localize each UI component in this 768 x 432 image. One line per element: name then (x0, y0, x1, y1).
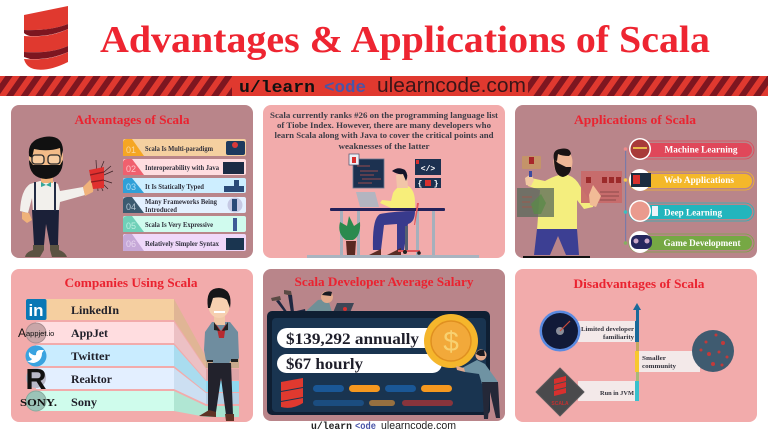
pill: annual salary: $139,292 annually (286, 331, 419, 348)
icon: Scala logo (24, 6, 68, 70)
panel: companies using Scala (11, 269, 253, 422)
illustration: developer at desk (307, 154, 479, 258)
text block: of Tiobe Index. However, there are many developers who (277, 120, 491, 130)
text block: Scala currently ranks #26 on the programming language list (270, 110, 498, 120)
heading: Scala Developer Average Salary (294, 274, 474, 289)
row: AppJet (18, 322, 174, 343)
row 06: 06 (126, 239, 136, 249)
illustration: man pushing coin (456, 350, 500, 419)
red panel (581, 171, 622, 203)
pill: game development: Game Development (664, 238, 740, 248)
pill: hourly salary (277, 354, 442, 373)
row: AppJet: A (18, 326, 26, 340)
panel: applications of Scala (515, 105, 757, 258)
item: limited developer familiarity (540, 310, 635, 352)
row 05: 05 (126, 221, 136, 231)
illustration: developer at desk: } (434, 180, 439, 189)
code panel (517, 188, 554, 217)
row 04: Many Frameworks Being (145, 199, 218, 206)
row: Reaktor: Reaktor (71, 374, 112, 386)
row 06: Relatively Simpler Syntax (145, 241, 220, 248)
pill: machine learning: Machine Learning (664, 144, 738, 154)
screen (267, 311, 490, 415)
icon: coin (424, 314, 478, 368)
pill: deep learning: Deep Learning (664, 208, 723, 218)
illustration: lying developer (271, 290, 354, 315)
row 02: Interoperability with Java (145, 165, 220, 172)
row: Twitter: Twitter (71, 351, 110, 363)
footer brand: ulearncode.com (381, 420, 456, 432)
row: Reaktor (26, 364, 174, 396)
pill: web applications: Web Applications (664, 175, 735, 185)
vertical connector (625, 149, 626, 243)
row 05: Scala Is Very Expressive (145, 222, 213, 229)
panel: advantages of Scala (11, 105, 253, 258)
arrow (633, 303, 641, 401)
row 04 (123, 197, 246, 214)
row 04: 04 (126, 202, 136, 212)
text: brand: u/learn (239, 79, 315, 98)
heading: Applications of Scala (574, 112, 697, 127)
illustration: developer at desk: { (418, 180, 423, 189)
illustration: bearded man (20, 137, 113, 257)
pill: hourly salary: $67 hourly (286, 356, 363, 373)
text: website: ulearncode.com (377, 75, 526, 97)
row 03: It Is Statically Typed (145, 184, 204, 191)
text: code: <ode (324, 79, 366, 98)
row 01: Scala Is Multi-paradigm (145, 146, 213, 153)
item: smaller community: community (642, 363, 677, 370)
panel: developer salary (263, 269, 505, 421)
row: AppJet: appjet.io (26, 329, 54, 338)
row 03 (123, 178, 246, 193)
row 01 (123, 139, 246, 156)
text block: learn Scala along with Java to cover the critical points and (274, 130, 494, 140)
row: Sony: Sony (71, 397, 97, 409)
text block: weaknesses of the latter (338, 141, 430, 151)
shaded perspective bands (174, 299, 239, 417)
item: limited developer familiarity: familiarity (603, 334, 635, 341)
banner: striped brand strip (0, 75, 768, 98)
panel: disadvantages of Scala (515, 269, 757, 422)
application pills (624, 138, 754, 253)
row: LinkedIn (26, 299, 174, 320)
panel: Tiobe ranking (263, 105, 505, 258)
list: advantages (123, 139, 246, 251)
item: smaller community: Smaller (642, 355, 666, 362)
item: smaller community (639, 330, 734, 372)
heading: Advantages of Scala (74, 112, 190, 127)
row: Twitter (26, 345, 174, 366)
pill: annual salary (277, 328, 442, 348)
decorative bars (313, 385, 453, 406)
icon: Scala logo small (281, 378, 303, 408)
illustration: man in sweater (199, 288, 239, 421)
row: Sony: SONY. (20, 397, 57, 409)
title: Advantages & Applications of Scala (100, 19, 710, 61)
row: Sony (20, 391, 174, 411)
row 02: 02 (126, 164, 136, 174)
text block (270, 110, 498, 151)
heading: Disadvantages of Scala (574, 276, 705, 291)
row 02 (123, 159, 246, 175)
item: run in JVM: SCALA (551, 401, 569, 407)
item: run in JVM: Run in JVM (600, 390, 635, 397)
icon: coin: $ (443, 326, 459, 357)
row: Reaktor: R (26, 364, 47, 396)
row: LinkedIn: LinkedIn (71, 305, 120, 317)
item: limited developer familiarity: Limited developer (581, 326, 634, 333)
row: AppJet: AppJet (71, 328, 108, 340)
row 06 (123, 234, 246, 251)
row 03: 03 (126, 182, 136, 192)
footer brand (311, 420, 456, 432)
heading: Companies Using Scala (64, 275, 198, 290)
illustration: man with panels (517, 149, 622, 258)
row 04: Introduced (145, 207, 177, 214)
row 05 (123, 216, 246, 232)
illustration: developer at desk: </> (421, 165, 435, 174)
item: run in JVM (536, 368, 635, 416)
tan panel (522, 156, 541, 169)
row: LinkedIn: in (28, 301, 44, 320)
row 01: 01 (126, 145, 136, 155)
